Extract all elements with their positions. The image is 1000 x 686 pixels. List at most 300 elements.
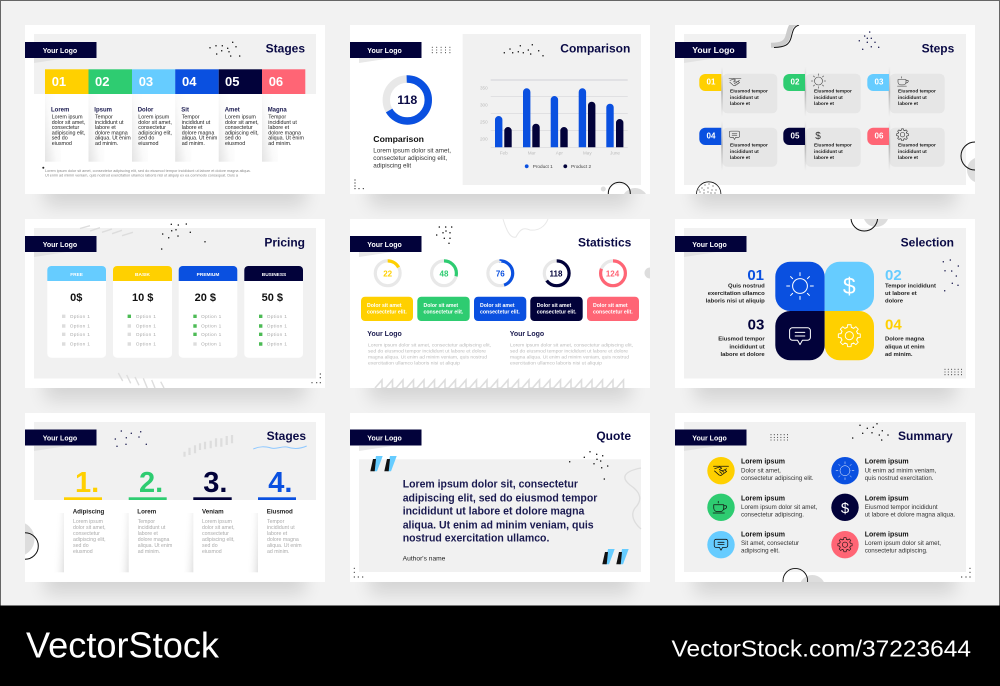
step cards: Eiusmod tempor	[730, 89, 768, 95]
column texts: consectetur	[138, 125, 166, 131]
step cards: 04	[707, 132, 716, 141]
item 01: 01	[747, 267, 764, 284]
stage 3: Veniam	[202, 508, 224, 515]
plan: Business	[244, 266, 303, 358]
step cards: labore et	[730, 101, 750, 107]
column texts: Magna	[268, 108, 287, 114]
item: chat	[707, 531, 799, 558]
stage 2: aliqua. Ut enim	[138, 543, 172, 549]
numbered colour strip: 05	[225, 74, 239, 89]
logo banner	[350, 430, 422, 446]
stage 4: Eiusmod	[267, 508, 293, 515]
plan: Business: 50 $	[262, 292, 283, 304]
step cards: labore et	[730, 155, 750, 161]
logo banner	[675, 42, 746, 58]
brand name: VectorStock	[26, 625, 220, 666]
column texts: aliqua. Ut enim	[95, 136, 131, 142]
footnote: Ut enim ad minim veniam, quis nostrud exercitation ullamco laboris nisi ut aliquip ex ea commodo consequat. Duis a	[45, 173, 239, 178]
right text block	[510, 331, 633, 367]
item: dollar	[831, 494, 955, 521]
quote text	[403, 479, 598, 545]
column texts: incididunt ut	[268, 120, 297, 126]
step cards: $	[815, 131, 821, 142]
coloured label boxes	[361, 297, 639, 321]
item 03: incididunt ut	[729, 344, 765, 350]
plan: Business: Option 1	[267, 332, 287, 338]
step cards: labore et	[814, 155, 834, 161]
item 02: Tempor incididunt	[885, 284, 936, 290]
logo banner: Your Logo	[692, 435, 727, 442]
panel: Statistics	[350, 219, 656, 388]
plan: Free: Option 1	[70, 332, 90, 338]
stage 1: sed do	[73, 543, 89, 549]
stage 2: dolore magna	[138, 537, 170, 543]
dot scatter	[115, 431, 146, 446]
comparison text: Lorem ipsum dolor sit amet,	[373, 147, 451, 154]
donut row	[375, 261, 625, 286]
stage 1: 1.	[75, 467, 99, 499]
item: dollar: $	[841, 500, 850, 517]
column texts: sed do	[52, 136, 68, 142]
column texts: Dolor	[138, 108, 154, 114]
plan: Premium: Option 1	[201, 342, 222, 348]
item: gear	[831, 531, 941, 558]
item 02	[885, 267, 936, 305]
item 01	[706, 267, 765, 305]
title: Pricing	[264, 236, 305, 250]
stage 1: Adipiscing	[73, 508, 105, 515]
quote text: adipiscing elit, sed do eiusmod tempor	[403, 492, 598, 504]
column texts: Lorem ipsum	[138, 115, 170, 121]
item: dollar: Lorem ipsum	[865, 495, 909, 502]
left text block: sed do eiusmod tempor incididunt ut labore et dolore	[368, 349, 486, 355]
column texts: Tempor	[95, 115, 113, 121]
stage 4: 4.	[268, 467, 292, 499]
step cards: 03	[875, 78, 884, 87]
step cards: incididunt ut	[730, 149, 759, 155]
numbered colour strip: 06	[269, 74, 283, 89]
panel: Stages numbered list	[0, 413, 325, 582]
title with wave: Stages	[267, 429, 306, 443]
coloured label boxes: consectetur elit.	[424, 310, 464, 316]
plan: Business: Option 1	[267, 324, 287, 330]
step cards: 06	[875, 132, 884, 141]
item 04: aliqua ut enim	[885, 344, 925, 350]
bar chart: June	[610, 150, 620, 155]
logo banner	[675, 430, 746, 446]
title: Steps	[922, 42, 955, 56]
coloured label boxes: consectetur elit.	[537, 310, 577, 316]
quadrant tile: chat	[775, 311, 825, 360]
quote text: Lorem ipsum dolor sit, consectetur	[403, 479, 579, 491]
plan: Basic	[113, 266, 172, 358]
plan: Business: BUSINESS	[262, 272, 287, 278]
column texts: Lorem ipsum	[225, 115, 256, 121]
column texts: consectetur	[52, 125, 80, 131]
column texts: incididunt ut	[95, 120, 124, 126]
item 04: 04	[885, 316, 902, 333]
donut values: 48	[440, 269, 449, 278]
donut: 118: 118	[397, 93, 417, 107]
stage 4	[258, 467, 302, 555]
stage 2	[129, 467, 172, 555]
item: cup: Lorem ipsum	[741, 495, 785, 502]
closing quotation marks	[602, 549, 629, 564]
right text block: Lorem ipsum dolor sit amet, consectetur adipiscing elit,	[510, 343, 633, 349]
stage 4: aliqua. Ut enim	[267, 543, 302, 549]
stage 4: Tempor	[267, 519, 285, 525]
logo banner	[25, 430, 96, 446]
donut: 118	[386, 79, 428, 121]
item: gear: Lorem ipsum dolor sit amet,	[865, 540, 941, 547]
plan: Basic: Option 1	[136, 332, 156, 338]
item 03: labore et dolore	[720, 352, 765, 358]
column texts: aliqua. Ut enim	[268, 136, 304, 142]
title: Stages	[266, 42, 305, 56]
comparison text	[373, 134, 451, 169]
coloured label boxes: Dolor sit amet	[593, 303, 628, 309]
plan: Premium: Option 1	[201, 332, 222, 338]
step cards: labore et	[898, 101, 918, 107]
plan: Premium: PREMIUM	[197, 272, 219, 278]
column texts	[51, 108, 304, 147]
donut values: 118	[550, 269, 563, 278]
step cards: Eiusmod tempor	[814, 89, 852, 95]
stage 2: ad minim.	[138, 549, 160, 555]
item: cup	[707, 494, 818, 521]
plan: Basic: Option 1	[136, 314, 156, 320]
logo banner: Your Logo	[367, 48, 402, 55]
stage 4: incididunt ut	[267, 525, 295, 531]
numbered colour strip: 01	[52, 74, 66, 89]
stage 3: 3.	[203, 467, 227, 499]
item: handshake	[707, 457, 814, 484]
quadrant tile: gear	[825, 311, 874, 360]
left text block	[367, 331, 491, 367]
right text block: magna aliqua. Ut enim ad minim veniam, quis nostrud	[510, 355, 629, 361]
quote text: nostrud exercitation ullamco.	[403, 533, 549, 545]
item: gear: Lorem ipsum	[865, 531, 909, 538]
column texts: eiusmod	[225, 141, 245, 147]
quadrant tile: dollar	[825, 262, 874, 311]
opening quotation marks	[370, 456, 397, 471]
item 01: exercitation ullamco	[708, 291, 765, 297]
dot scatter	[570, 452, 608, 479]
item 04: Dolore magna	[885, 337, 925, 343]
stage 3: Lorem ipsum	[202, 519, 232, 525]
quote text: aliqua. Ut enim ad minim veniam, quis	[403, 519, 594, 531]
stage 3: sed do	[202, 543, 218, 549]
item 02: 02	[885, 267, 902, 284]
bar chart: Feb	[500, 150, 508, 155]
column texts: adipiscing elit,	[52, 130, 85, 136]
bar chart: May	[583, 150, 592, 155]
column texts: Tempor	[182, 115, 200, 121]
coloured label boxes: Dolor sit amet	[480, 303, 515, 309]
item: cup: Lorem ipsum dolor sit amet,	[741, 504, 818, 511]
column texts: dolore magna	[182, 130, 214, 136]
bar chart	[480, 80, 628, 169]
dot scatter	[210, 42, 240, 56]
logo banner: Your Logo	[43, 435, 77, 442]
panel: Stages numbered columns	[25, 25, 325, 194]
plan: Premium	[179, 266, 237, 358]
column texts: Lorem ipsum	[52, 115, 83, 121]
stage 3: consectetur	[202, 531, 229, 537]
logo banner	[25, 236, 96, 252]
item: chat: adipiscing elit.	[741, 548, 780, 555]
numbered colour strip: 03	[139, 74, 153, 89]
column texts: eiusmod	[52, 141, 72, 147]
footnote: Lorem ipsum dolor sit amet, consectetur adipiscing elit, sed do eiusmod tempor incididunt ut labore et dolore magna aliqua.	[45, 168, 251, 173]
item 03	[718, 316, 765, 358]
donut values: 124	[606, 269, 620, 278]
bar chart: 250	[480, 119, 488, 124]
donut values: 22	[383, 269, 393, 278]
plan: Premium: Option 1	[201, 324, 222, 330]
stage 3: eiusmod	[202, 549, 222, 555]
column texts: labore et	[268, 125, 290, 131]
dot scatter	[853, 424, 888, 440]
bar chart: 200	[480, 136, 488, 141]
step cards: Eiusmod tempor	[898, 89, 936, 95]
bar chart: Mar	[528, 150, 536, 155]
step cards: 02	[791, 78, 800, 87]
column texts: Lorem	[51, 108, 69, 114]
panel: Pricing plans	[25, 219, 325, 388]
step cards: 05	[791, 132, 800, 141]
column texts: adipiscing elit,	[225, 130, 259, 136]
right text block: exercitation ullamco laboris nisi ut aliquip	[510, 361, 602, 367]
stage 1: adipiscing elit,	[73, 537, 106, 543]
title: Quote	[596, 429, 631, 443]
item: chat: Lorem ipsum	[741, 531, 785, 538]
item: sun	[831, 457, 937, 484]
plan: Basic: Option 1	[136, 324, 156, 330]
item 03: 03	[748, 316, 764, 333]
plan: Free: FREE	[70, 272, 84, 278]
stage 2: Lorem	[137, 508, 157, 515]
author: Author's name	[403, 556, 446, 562]
numbered colour strip: 02	[95, 74, 109, 89]
column texts: sed do	[225, 136, 241, 142]
comparison text: consectetur adipiscing elit,	[373, 155, 447, 162]
item 01: laboris nisi ut aliquip	[706, 299, 765, 305]
logo banner: Your Logo	[692, 242, 727, 249]
numbered colour strip	[45, 69, 305, 94]
plan: Free: Option 1	[70, 324, 90, 330]
column texts: dolore magna	[95, 130, 128, 136]
column texts: labore et	[182, 125, 203, 131]
coloured label boxes: consectetur elit.	[480, 310, 520, 316]
column texts: dolor sit amet,	[138, 120, 172, 126]
logo banner: Your Logo	[43, 242, 77, 249]
left text block: magna aliqua. Ut enim ad minim veniam, quis nostrud	[368, 355, 487, 361]
title: Selection	[901, 236, 954, 250]
title: Comparison	[560, 42, 630, 56]
quadrant tile: dollar: $	[843, 273, 856, 299]
stage 2: incididunt ut	[138, 525, 166, 531]
logo banner	[350, 236, 422, 252]
step cards: incididunt ut	[814, 149, 843, 155]
logo banner: Your Logo	[367, 435, 402, 442]
logo banner	[350, 42, 422, 58]
item: dollar: ut labore et dolore magna aliqua.	[865, 512, 955, 519]
column texts: eiusmod	[138, 141, 159, 147]
column texts: consectetur	[225, 125, 253, 131]
bar chart: Product 1	[533, 164, 553, 169]
coloured label boxes: Dolor sit amet	[424, 303, 458, 309]
coloured label boxes: Dolor sit amet	[367, 303, 402, 309]
plan: Basic: Option 1	[136, 342, 156, 348]
bar chart: Product 2	[571, 164, 591, 169]
stage 1: eiusmod	[73, 549, 93, 555]
stage 3: dolor sit amet,	[202, 525, 235, 531]
column texts: adipiscing elit,	[138, 130, 172, 136]
logo banner	[25, 42, 96, 58]
column texts: labore et	[95, 125, 116, 131]
column texts: ad minim.	[182, 141, 205, 147]
item 02: ut labore et	[885, 291, 917, 297]
item: sun: Lorem ipsum	[865, 459, 909, 466]
column shading	[45, 103, 272, 162]
plan: Free: Option 1	[70, 342, 90, 348]
panel: Quote	[350, 413, 650, 582]
stage 1: consectetur	[73, 531, 100, 537]
step cards: labore et	[898, 155, 918, 161]
step cards: incididunt ut	[898, 149, 927, 155]
coloured label boxes: consectetur elit.	[367, 310, 407, 316]
panel: Steps cards	[675, 25, 975, 194]
column texts: ad minim.	[268, 141, 291, 147]
item 04	[885, 316, 925, 358]
item: chat: Sit amet, consectetur	[741, 540, 799, 547]
footer bar	[0, 606, 1000, 686]
stage 4: dolore magna	[267, 537, 299, 543]
column shading	[54, 513, 258, 572]
step cards: 01	[707, 78, 716, 87]
column texts: Sit	[181, 108, 189, 114]
item: sun: Ut enim ad minim veniam,	[865, 467, 937, 474]
logo banner: Your Logo	[43, 48, 77, 55]
panel: Selection quadrant	[675, 201, 975, 388]
image reference: VectorStock.com/37223644	[672, 636, 971, 662]
stage 2: labore et	[138, 531, 158, 537]
column texts: ad minim.	[95, 141, 118, 147]
item 04: ad minim.	[885, 352, 913, 358]
left text block: Your Logo	[367, 331, 402, 338]
plan: Free: 0$	[70, 292, 82, 304]
stage 1: Lorem ipsum	[73, 519, 103, 525]
stage 3	[193, 467, 235, 555]
plan: Free	[47, 266, 106, 358]
step cards: Eiusmod tempor	[898, 143, 936, 149]
plan: Basic: 10 $	[132, 292, 153, 304]
comparison text: Comparison	[373, 134, 424, 144]
column texts: Ipsum	[94, 108, 112, 114]
item: gear: consectetur adipiscing.	[865, 548, 928, 555]
item: sun: quis nostrud exercitation.	[865, 475, 934, 482]
comparison text: adipiscing elit	[373, 162, 411, 169]
quote text: incididunt ut labore et dolore magna	[403, 506, 585, 518]
bar chart: 300	[480, 102, 488, 107]
stage 2: Tempor	[138, 519, 155, 525]
step cards	[699, 67, 945, 171]
right text block: Your Logo	[510, 331, 544, 338]
coloured label boxes: Dolor sit amet	[537, 303, 572, 309]
item: handshake: Lorem ipsum	[741, 459, 785, 466]
plan: Free: Option 1	[70, 314, 90, 320]
step cards: labore et	[814, 101, 834, 107]
column texts: incididunt ut	[182, 120, 211, 126]
step cards: Eiusmod tempor	[814, 143, 852, 149]
panel: Comparison chart	[350, 25, 650, 194]
column texts: aliqua. Ut enim	[182, 136, 218, 142]
plan: Basic: BASIK	[135, 272, 150, 278]
right text block: sed do eiusmod tempor incididunt ut labore et dolore	[510, 349, 628, 355]
numbered colour strip: 04	[182, 74, 197, 89]
dot scatter	[504, 45, 543, 56]
quadrant tile: sun	[775, 262, 825, 311]
stage 1: dolor sit amet,	[73, 525, 106, 531]
bar chart: 350	[480, 85, 488, 90]
stage 1	[64, 467, 106, 555]
dot scatter	[859, 32, 879, 49]
column texts: dolore magna	[268, 130, 301, 136]
left text block: Lorem ipsum dolor sit amet, consectetur adipiscing elit,	[368, 343, 491, 349]
dot scatter	[943, 260, 958, 291]
panel: Summary	[675, 413, 975, 601]
step cards: Eiusmod tempor	[730, 143, 768, 149]
title: Statistics	[578, 236, 632, 250]
stage 4: labore et	[267, 531, 288, 537]
footnote	[42, 167, 251, 178]
stage 2: 2.	[139, 467, 163, 499]
plan: Premium: 20 $	[195, 292, 216, 304]
plan: Premium: Option 1	[201, 314, 222, 320]
coloured label boxes: consectetur elit.	[593, 310, 633, 316]
donut values	[384, 270, 620, 276]
item 01: Quis nostrud	[728, 284, 765, 290]
column texts: dolor sit amet,	[52, 120, 85, 126]
logo banner: Your Logo	[692, 45, 735, 55]
step cards: incididunt ut	[814, 95, 843, 101]
donut values: 76	[496, 269, 505, 278]
item: dollar: Eiusmod tempor incididunt	[865, 504, 938, 511]
column texts: Amet	[225, 108, 240, 114]
item: cup: consectetur adipiscing.	[741, 512, 804, 519]
item 03: Eiusmod tempor	[718, 337, 765, 343]
logo banner	[675, 236, 746, 252]
column texts: Tempor	[268, 115, 286, 121]
item: handshake: Dolor sit amet,	[741, 467, 781, 474]
column texts: sed do	[138, 136, 154, 142]
column texts: dolor sit amet,	[225, 120, 259, 126]
title with wave	[253, 429, 307, 449]
item 02: dolore	[885, 299, 904, 305]
title: Summary	[898, 429, 953, 443]
step cards: incididunt ut	[898, 95, 927, 101]
bar chart: Apr	[556, 150, 563, 155]
item: handshake: consectetur adipiscing elit.	[741, 475, 814, 482]
dot scatter	[437, 227, 452, 243]
dot scatter	[162, 224, 205, 249]
stage 4: ad minim.	[267, 549, 290, 555]
step cards: incididunt ut	[730, 95, 759, 101]
stage 3: adipiscing elit,	[202, 537, 235, 543]
plan: Business: Option 1	[267, 342, 287, 348]
left text block: exercitation ullamco laboris nisi ut aliquip	[368, 361, 460, 367]
